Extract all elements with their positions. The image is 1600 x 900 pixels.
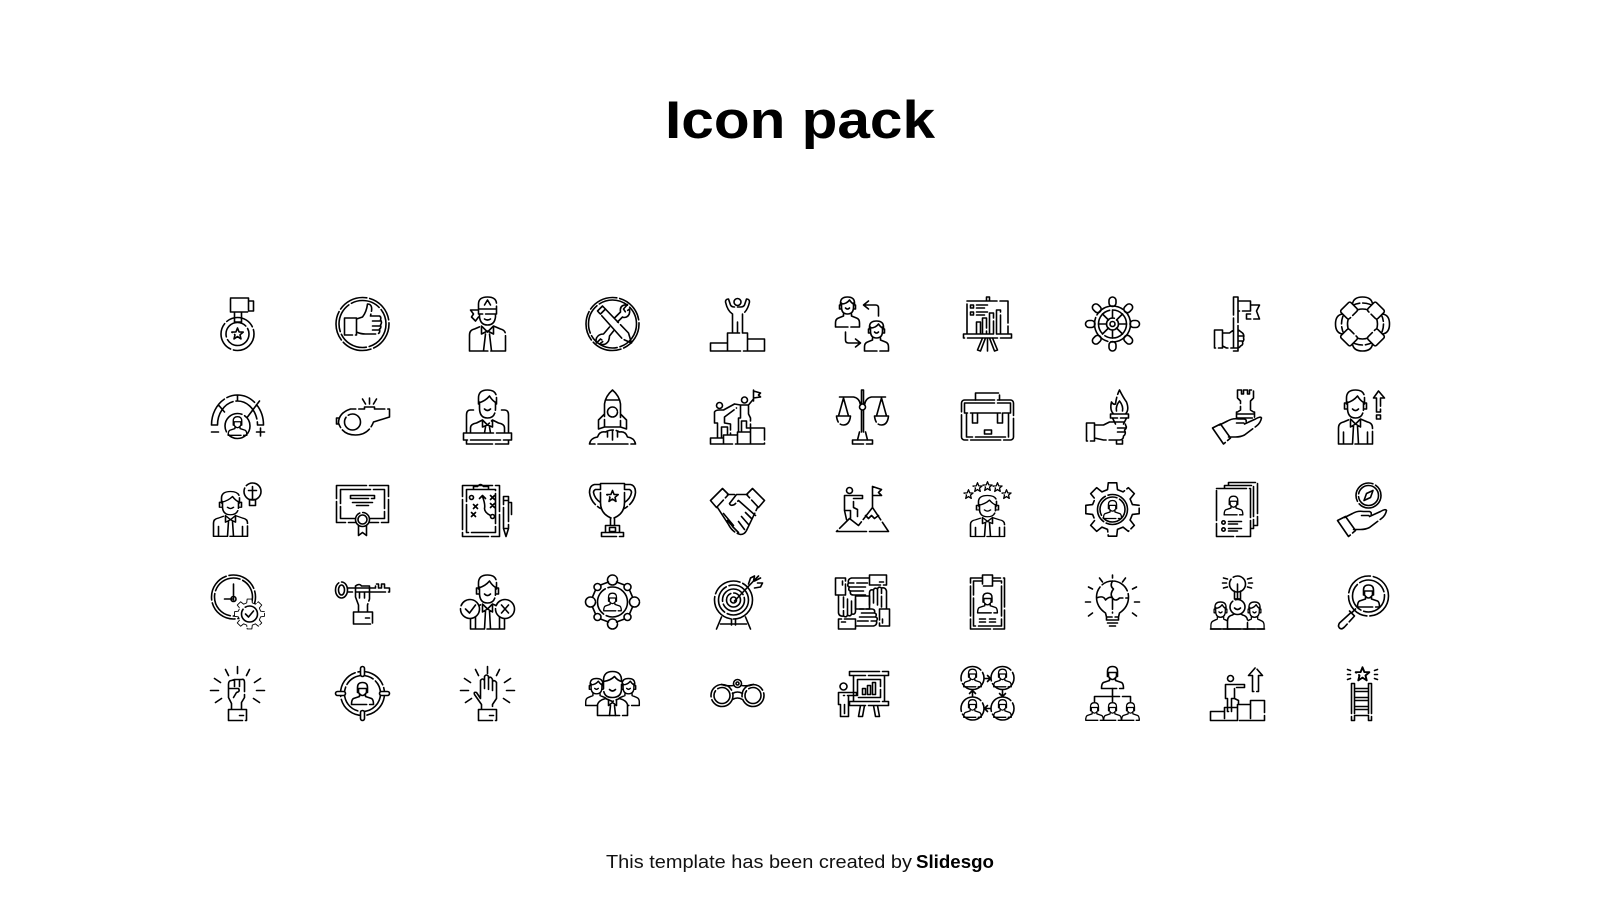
- icon: team with idea bulb: [1210, 576, 1264, 629]
- icon: four people connected: [961, 666, 1014, 720]
- icon grid: [210, 297, 1390, 720]
- icon: climbers on stairs with flag: [710, 390, 764, 444]
- icon: gear with person: [1086, 483, 1139, 536]
- icon: tactics clipboard and pen: [462, 484, 512, 536]
- icon: man with up arrow: [1338, 390, 1384, 444]
- icon: blindfolded woman: [470, 297, 506, 351]
- icon: people exchange: [836, 297, 888, 351]
- icon: medal with star: [221, 298, 254, 350]
- icon: scales of justice: [836, 390, 888, 444]
- icon: profile cards: [1216, 482, 1258, 536]
- icon: life ring: [1336, 297, 1390, 351]
- icon: performance gauge: [212, 395, 264, 438]
- icon: binoculars: [711, 680, 764, 706]
- icon: handshake: [710, 488, 764, 534]
- icon: certificate: [336, 486, 388, 536]
- icon: whistle: [336, 398, 390, 435]
- icon: compass on hand: [1338, 483, 1386, 536]
- icon: group of three people: [586, 672, 639, 716]
- icon: person in crosshair: [336, 666, 390, 720]
- icon: hand holding torch: [1086, 390, 1128, 444]
- icon: presenter with chart: [838, 672, 888, 716]
- icon: magnifier with person: [1338, 576, 1388, 629]
- icon: target with arrow: [714, 576, 762, 629]
- title: Icon pack: [665, 91, 936, 150]
- icon: people network: [586, 575, 640, 629]
- icon: thumbs up badge: [336, 298, 389, 350]
- icon: puzzle light bulb: [1086, 575, 1140, 626]
- footer credit: Slidesgo: [916, 851, 994, 872]
- icon: ship wheel: [1086, 297, 1140, 351]
- icon: team hierarchy: [1086, 666, 1139, 720]
- icon: man with check and cross: [460, 575, 514, 629]
- icon: hiker on mountain: [836, 486, 888, 532]
- icon: hand holding flag: [1214, 297, 1260, 351]
- icon: climber on steps with arrow: [1210, 668, 1264, 720]
- icon: id badge: [970, 575, 1004, 629]
- icon: raised open hand with rays: [460, 666, 514, 720]
- icon: four hands teamwork: [836, 575, 890, 629]
- icon: winner on podium: [710, 298, 764, 351]
- icon: raised fist with rays: [210, 666, 264, 720]
- icon: tools prohibited: [586, 298, 639, 350]
- icon: man with five stars: [964, 482, 1011, 537]
- icon: chess rook on hand: [1212, 390, 1262, 444]
- icon: briefcase: [962, 393, 1014, 440]
- icon: man with idea bulb: [214, 483, 261, 536]
- icon: hand holding key: [336, 582, 390, 624]
- icon: trophy: [590, 484, 636, 536]
- icon: rocket: [590, 390, 636, 444]
- icon: clock with gear: [212, 575, 264, 629]
- icon: speaker at podium: [464, 390, 512, 444]
- icon: ladder to star: [1348, 667, 1378, 720]
- footer credit: This template has been created by: [606, 851, 913, 872]
- icon: presentation board: [964, 297, 1012, 351]
